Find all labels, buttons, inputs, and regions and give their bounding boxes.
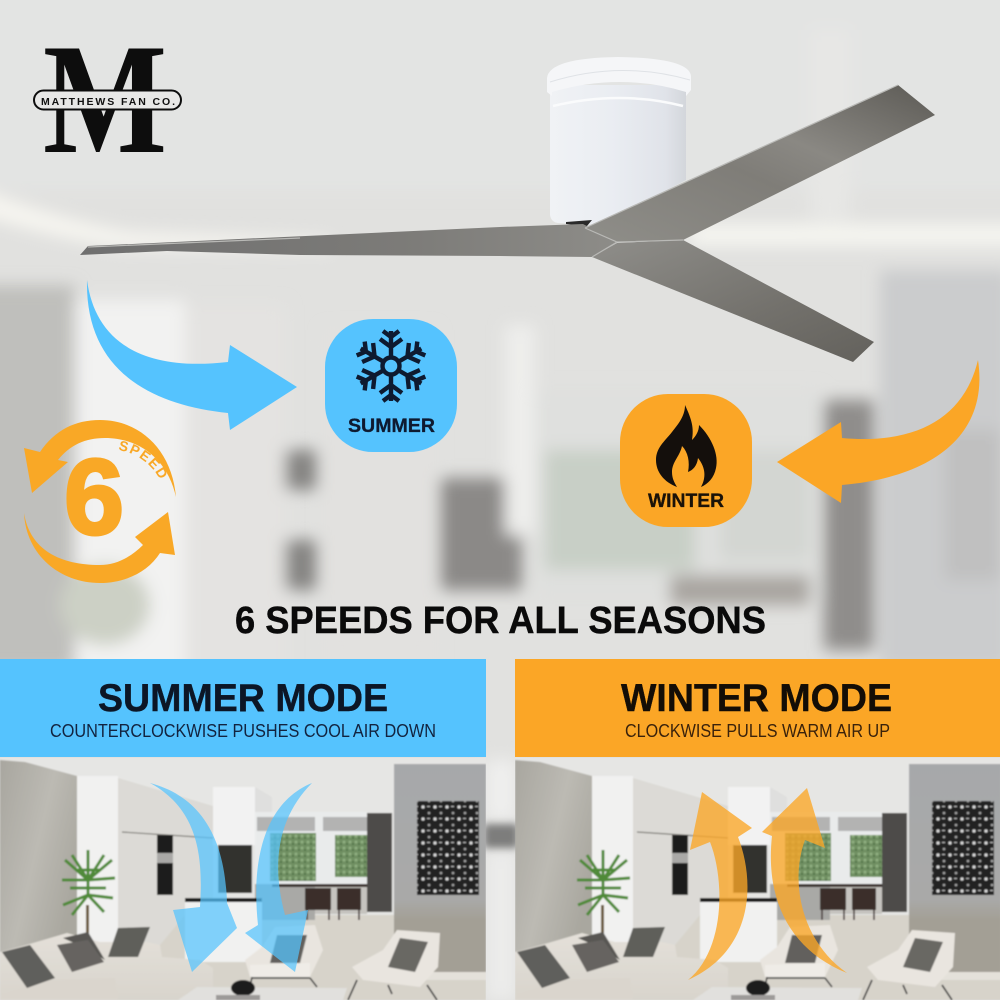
- motor housing: [547, 57, 691, 226]
- icon: 6 speed: SPEED: [119, 441, 166, 478]
- logo: Matthews Fan Co.: MATTHEWS FAN CO.: [41, 96, 175, 108]
- arrow: cool air right: [245, 783, 312, 972]
- badge: winter: WINTER: [648, 491, 724, 512]
- arrow: warm air right: [762, 788, 847, 973]
- arrow: cool air left: [150, 783, 237, 972]
- icon: flame: [656, 405, 717, 487]
- icon: snowflake: [355, 331, 427, 401]
- badge: winter: [620, 394, 752, 527]
- panel: winter mode header: WINTER MODE: [621, 677, 892, 720]
- panel: summer mode header: [0, 659, 486, 757]
- badge: summer: [325, 319, 457, 452]
- arrow: winter orange: [777, 360, 979, 503]
- blade: lower right: [592, 240, 874, 362]
- logo: Matthews Fan Co.: M: [43, 12, 167, 187]
- panel: winter mode header: CLOCKWISE PULLS WARM AIR UP: [625, 721, 890, 741]
- badge: summer: SUMMER: [348, 416, 435, 437]
- arrow: warm air left: [688, 792, 752, 980]
- title: 6 SPEEDS FOR ALL SEASONS: [235, 600, 766, 642]
- panel: winter mode header: [515, 659, 1000, 757]
- blade: left: [80, 224, 617, 257]
- panel: summer mode header: SUMMER MODE: [98, 677, 388, 720]
- photo: winter room with air arrows: [515, 757, 1000, 1000]
- ceiling fan: [80, 57, 935, 362]
- panel: summer mode header: COUNTERCLOCKWISE PUSHES COOL AIR DOWN: [50, 721, 436, 741]
- blade: upper right: [585, 85, 935, 242]
- arrow: summer blue: [87, 280, 297, 430]
- photo: summer room with air arrows: [0, 757, 486, 1000]
- icon: 6 speed: [24, 420, 176, 583]
- icon: 6 speed: 6: [64, 436, 124, 557]
